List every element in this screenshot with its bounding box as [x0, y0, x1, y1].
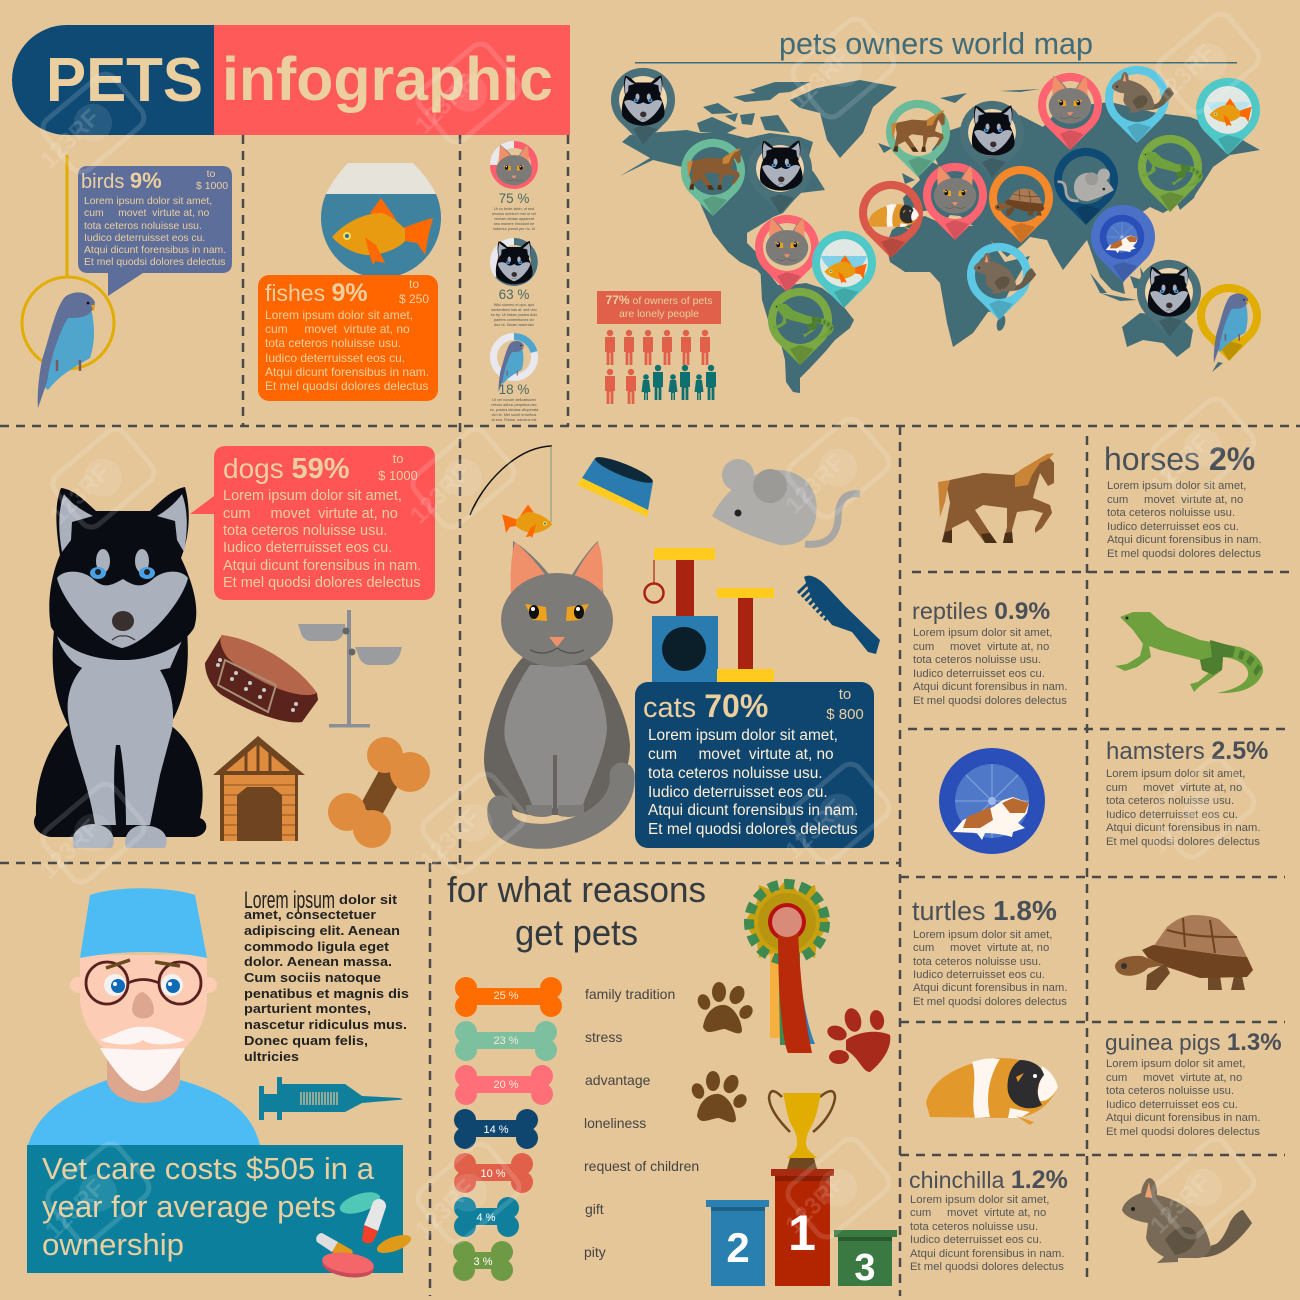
- panel: reptiles: [912, 598, 1263, 707]
- banner: vet care costs: year for average pets: [42, 1189, 336, 1224]
- callout: cats: cum movet virtute at, no: [648, 746, 834, 763]
- pin: cat: [755, 215, 819, 292]
- heading: pets owners world map: pets owners world map: [779, 26, 1093, 61]
- bone: 23%: [455, 1021, 557, 1061]
- text: turtles: turtles: [912, 896, 993, 926]
- title banner: [12, 25, 570, 135]
- donut: birds 18%: 18 %: [499, 382, 529, 397]
- text: chinchilla: 1.2%: [1011, 1166, 1068, 1194]
- icon: bone: [328, 737, 430, 848]
- callout: cats: cats 70%: [643, 688, 768, 724]
- callout: fishes: tota ceteros noluisse usu.: [265, 336, 401, 350]
- donut: dogs 63%: 63 %: [499, 287, 529, 302]
- icon: paw red: [825, 1006, 890, 1072]
- callout: dogs: Iudico deterruisset eos cu.: [223, 540, 392, 556]
- body: guinea pigs: Lorem ipsum dolor sit amet,: [1106, 1058, 1245, 1070]
- callout: 77% lonely people: are lonely people: [619, 308, 699, 320]
- heading: for what reasons get pets: get pets: [515, 912, 638, 953]
- body: turtles: cum movet virtute at, no: [913, 942, 1049, 954]
- body: hamsters: tota ceteros noluisse usu.: [1106, 795, 1234, 807]
- icon: toy mouse: [712, 459, 860, 545]
- callout: 77% lonely people: [597, 291, 721, 324]
- body: hamsters: Iudico deterruisset eos cu.: [1106, 809, 1238, 821]
- icon: food bowl: [577, 453, 655, 517]
- watermark stamps: 123RF: [1145, 1169, 1215, 1239]
- donut: birds 18%: vim te. Mel sonet erroribus: [492, 413, 536, 417]
- watermark stamps: 123RF: [45, 459, 115, 529]
- callout: dogs: [190, 446, 435, 600]
- body: turtles: Lorem ipsum dolor sit amet,: [913, 929, 1052, 941]
- donut: cats 75%: [492, 144, 536, 231]
- heading: for what reasons get pets: for what reasons: [447, 869, 706, 910]
- body: reptiles: cum movet virtute at, no: [913, 641, 1049, 653]
- text: chinchilla: chinchilla: [909, 1167, 1011, 1193]
- icon: kennel: [213, 736, 305, 841]
- pin: hamster: [1091, 205, 1155, 282]
- pin: husky: [611, 68, 675, 145]
- callout: 77% lonely people: 77% of owners of pets: [606, 293, 712, 307]
- panel: dogs: [34, 446, 435, 848]
- pin: chinchilla: [1105, 66, 1174, 143]
- text: horses: horses: [1104, 441, 1209, 477]
- bone: 10%: [454, 1153, 533, 1193]
- illustration: guinea pig: [926, 1058, 1058, 1125]
- watermark stamps: 123RF: [780, 794, 850, 864]
- callout: dogs: dogs 59%: [223, 453, 350, 485]
- callout: fishes: Iudico deterruisset eos cu.: [265, 351, 405, 365]
- watermark stamps: 123RF: [35, 104, 105, 174]
- watermark stamps: 123RF: [785, 44, 855, 114]
- bone: 20%: [455, 1065, 553, 1105]
- callout: birds: tota ceteros noluisse usu.: [84, 221, 202, 232]
- bone: 14%: 14 %: [483, 1124, 509, 1136]
- pin: husky: [748, 137, 812, 214]
- pin: horse: [681, 139, 745, 216]
- callout: birds: Atqui dicunt forensibus in nam.: [84, 245, 226, 256]
- text: horses: 2%: [1209, 441, 1255, 477]
- donut: dogs 63%: duo ut. Dicam assentior: [494, 323, 535, 327]
- illustration: horse: [938, 453, 1054, 543]
- callout: birds: $ 1000: [196, 180, 228, 192]
- illustration: hamster wheel: [939, 748, 1045, 854]
- pin: horse: [886, 100, 950, 177]
- watermark stamps: 123RF: [1150, 39, 1220, 109]
- icon: paw brown lower: [690, 1071, 749, 1122]
- body: reptiles: Lorem ipsum dolor sit amet,: [913, 627, 1052, 639]
- text: vet lorem ipsum: penatibus et magnis dis: [244, 986, 409, 1001]
- icon: rosette: [744, 878, 830, 1053]
- body: reptiles: Et mel quodsi dolores delectus: [913, 695, 1067, 707]
- illustration: cat: [484, 541, 630, 836]
- donut: birds 18%: at sea. Fuisse, sanctus est: [492, 418, 537, 422]
- body: reptiles: Iudico deterruisset eos cu.: [913, 668, 1045, 680]
- text: vet lorem ipsum: Lorem ipsum: [244, 887, 335, 914]
- panel: fishes: [258, 163, 441, 401]
- icon: trophy: [769, 1091, 835, 1169]
- banner: vet care costs: [27, 1145, 403, 1273]
- text: vet lorem ipsum: ultricies: [244, 1049, 299, 1064]
- text: vet lorem ipsum: adipiscing elit. Aenean: [244, 923, 400, 938]
- panel: turtles: [912, 895, 1253, 1008]
- callout: cats: Iudico deterruisset eos cu.: [648, 784, 828, 801]
- text: vet lorem ipsum: Donec quam felis,: [244, 1033, 368, 1048]
- donut: cats 75%: sea munere tincidunt ne: [494, 222, 534, 226]
- watermark stamps: 123RF: [1145, 789, 1215, 859]
- callout: cats: to: [839, 686, 851, 703]
- callout: cats: tota ceteros noluisse usu.: [648, 765, 823, 782]
- watermark stamps: 123RF: [410, 69, 480, 139]
- text: vet lorem ipsum: dolor sit: [339, 892, 398, 907]
- watermark stamps: 123RF: [410, 1174, 480, 1244]
- podium: 1: [771, 1169, 834, 1286]
- body: horses: tota ceteros noluisse usu.: [1107, 507, 1235, 519]
- callout: dogs: to: [393, 451, 403, 466]
- watermark stamps: 123RF: [780, 1169, 850, 1239]
- watermark stamps: 123RF: [1145, 429, 1215, 499]
- callout: cats: Lorem ipsum dolor sit amet,: [648, 727, 838, 744]
- donut: dogs 63%: Wisi summo ei quo, quo: [494, 303, 534, 307]
- icon: collar: [205, 635, 318, 722]
- panel: cats: [470, 446, 880, 848]
- icon: cat tree: [644, 548, 774, 683]
- pin: guinea pig: [859, 181, 923, 258]
- bone: 3%: 3 %: [474, 1256, 493, 1268]
- pin: lizard: [1138, 135, 1203, 212]
- bone: 23%: 23 %: [493, 1035, 519, 1047]
- bone chart labels: family tradition: [585, 986, 675, 1002]
- callout: fishes: cum movet virtute at, no: [265, 322, 410, 336]
- map pins: [611, 66, 1261, 365]
- illustration: husky: [34, 487, 206, 848]
- donut: birds 18%: ex, postea fabulas vituperata: [490, 408, 539, 412]
- callout: dogs: Atqui dicunt forensibus in nam.: [223, 558, 421, 574]
- body: guinea pigs: Iudico deterruisset eos cu.: [1106, 1099, 1238, 1111]
- pin: bird: [1197, 284, 1261, 363]
- illustration: iguana: [1115, 612, 1263, 693]
- text: vet lorem ipsum: commodo ligula eget: [244, 939, 390, 954]
- donut: dogs 63%: sententiam has at, sed duo: [491, 308, 537, 312]
- podium: 1: 1: [788, 1205, 816, 1261]
- callout: fishes: Et mel quodsi dolores delectus: [265, 379, 428, 393]
- bone: 3%: [453, 1241, 513, 1281]
- body: chinchilla: Iudico deterruisset eos cu.: [910, 1234, 1042, 1246]
- pin: fish: [812, 231, 876, 308]
- donut: dogs 63%: [491, 241, 537, 327]
- callout: dogs: Et mel quodsi dolores delectus: [223, 575, 420, 591]
- banner: vet care costs: Vet care costs $505 in a: [42, 1151, 375, 1186]
- donut: cats 75%: mucius omnium mei ut vel: [492, 212, 536, 216]
- icon: paw brown: [696, 982, 755, 1033]
- bone: 4%: 4 %: [477, 1212, 496, 1224]
- callout: dogs: Lorem ipsum dolor sit amet,: [223, 488, 402, 504]
- pin: mouse: [1054, 148, 1118, 225]
- icon: pills: [316, 1188, 413, 1281]
- podium: 3: 3: [854, 1247, 876, 1289]
- donut: birds 18%: [490, 336, 539, 422]
- bone: 20%: 20 %: [493, 1079, 519, 1091]
- bone: 10%: 10 %: [480, 1168, 506, 1180]
- body: turtles: Iudico deterruisset eos cu.: [913, 969, 1045, 981]
- panel: vet: [27, 887, 413, 1281]
- callout: fishes: Lorem ipsum dolor sit amet,: [265, 308, 413, 322]
- bone chart labels: request of children: [584, 1158, 699, 1174]
- icon: parrot: [38, 292, 95, 408]
- podium: [706, 1169, 897, 1289]
- world map: [620, 80, 1260, 393]
- watermark stamps: 123RF: [415, 804, 485, 874]
- body: horses: Et mel quodsi dolores delectus: [1107, 548, 1261, 560]
- text: hamsters: hamsters: [1106, 738, 1211, 765]
- body: chinchilla: cum movet virtute at, no: [910, 1207, 1046, 1219]
- callout: cats: Atqui dicunt forensibus in nam.: [648, 802, 858, 819]
- panel: reasons: [447, 869, 897, 1289]
- panel: percent column: [490, 144, 539, 422]
- bone chart labels: advantage: [585, 1072, 651, 1088]
- pin: cat: [923, 163, 987, 240]
- bone: 25%: 25 %: [493, 990, 519, 1002]
- body: reptiles: tota ceteros noluisse usu.: [913, 654, 1041, 666]
- callout: birds: to: [207, 168, 216, 180]
- body: guinea pigs: Et mel quodsi dolores delectus: [1106, 1126, 1260, 1138]
- title: infographic: infographic: [222, 45, 553, 113]
- body: turtles: tota ceteros noluisse usu.: [913, 956, 1041, 968]
- icon: fishing rod toy: [470, 446, 552, 538]
- bone chart labels: pity: [584, 1244, 606, 1260]
- pin: husky: [960, 101, 1024, 178]
- text: vet lorem ipsum: parturient montes,: [244, 1001, 371, 1016]
- text: guinea pigs: 1.3%: [1227, 1029, 1282, 1056]
- bone chart labels: loneliness: [584, 1115, 646, 1131]
- illustration: turtle: [1115, 915, 1253, 990]
- callout: dogs: cum movet virtute at, no: [223, 506, 398, 522]
- text: reptiles: reptiles: [912, 598, 994, 624]
- banner: vet care costs: ownership: [42, 1227, 184, 1262]
- callout: birds: Lorem ipsum dolor sit amet,: [84, 196, 212, 207]
- donut: birds 18%: Ut vel novum delicatissimi: [492, 398, 536, 402]
- body: horses: Atqui dicunt forensibus in nam.: [1107, 534, 1261, 546]
- bone: 14%: [454, 1109, 538, 1149]
- panel: guinea pigs: [926, 1029, 1282, 1138]
- icon: bowl stand: [298, 610, 402, 728]
- bone: 4%: [454, 1197, 519, 1237]
- donut: birds 18%: rebum adhuc perpetua nec: [491, 403, 537, 407]
- callout: fishes: [258, 275, 438, 401]
- illustration: chinchilla: [1122, 1178, 1252, 1263]
- pin: cat: [1038, 73, 1102, 150]
- illustration: vet: [28, 888, 260, 1145]
- body: hamsters: Lorem ipsum dolor sit amet,: [1106, 768, 1245, 780]
- podium: 3: [834, 1230, 897, 1289]
- body: turtles: Et mel quodsi dolores delectus: [913, 996, 1067, 1008]
- text: reptiles: 0.9%: [994, 598, 1050, 625]
- callout: cats: Et mel quodsi dolores delectus: [648, 821, 858, 838]
- callout: cats: $ 800: [826, 706, 864, 723]
- podium: 2: 2: [726, 1224, 750, 1271]
- podium: 2: [706, 1200, 769, 1286]
- body: chinchilla: Lorem ipsum dolor sit amet,: [910, 1194, 1049, 1206]
- body: chinchilla: Atqui dicunt forensibus in nam.: [910, 1248, 1064, 1260]
- text: vet lorem ipsum: Cum sociis natoque: [244, 970, 381, 985]
- donut: dogs 63%: ex try. Ut fuisse postea dolo: [491, 313, 537, 317]
- body: hamsters: Atqui dicunt forensibus in nam.: [1106, 822, 1260, 834]
- callout: birds: [78, 166, 232, 296]
- panel: world map: [611, 26, 1261, 393]
- panel: birds: [22, 155, 232, 408]
- text: vet lorem ipsum: nascetur ridiculus mus.: [244, 1017, 407, 1032]
- bone chart: [453, 977, 562, 1281]
- callout: birds: cum movet virtute at, no: [84, 208, 210, 219]
- text: vet lorem ipsum: [244, 887, 409, 1064]
- hanging perch ring: [22, 155, 114, 369]
- callout: dogs: tota ceteros noluisse usu.: [223, 523, 387, 539]
- donut: dogs 63%: partem contentiones vix: [494, 318, 534, 322]
- body: horses: Iudico deterruisset eos cu.: [1107, 521, 1239, 533]
- title: infographic: [214, 25, 570, 135]
- callout: fishes: $ 250: [399, 292, 429, 306]
- pin: fish: [1196, 78, 1260, 155]
- icon: syringe: [259, 1077, 403, 1120]
- callout: birds: birds 9%: [81, 168, 162, 193]
- text: hamsters: 2.5%: [1211, 737, 1268, 765]
- donut: cats 75%: ludemur possit per no, id: [493, 227, 535, 231]
- body: horses: Lorem ipsum dolor sit amet,: [1107, 480, 1246, 492]
- body: reptiles: Atqui dicunt forensibus in nam.: [913, 681, 1067, 693]
- bone chart labels: stress: [585, 1029, 622, 1045]
- body: horses: cum movet virtute at, no: [1107, 494, 1243, 506]
- pictogram: people: [605, 330, 716, 404]
- callout: fishes: Atqui dicunt forensibus in nam.: [265, 365, 429, 379]
- callout: fishes: to: [409, 277, 419, 291]
- donut: cats 75%: 75 %: [499, 191, 529, 206]
- body: guinea pigs: Atqui dicunt forensibus in nam.: [1106, 1112, 1260, 1124]
- body: chinchilla: Et mel quodsi dolores delectus: [910, 1261, 1064, 1273]
- text: turtles: 1.8%: [993, 895, 1057, 926]
- icon: fish bowl: [321, 163, 441, 278]
- text: vet lorem ipsum: dolor. Aenean massa.: [244, 954, 392, 969]
- callout: birds: Iudico deterruisset eos cu.: [84, 233, 205, 244]
- callout: cats: [635, 682, 874, 848]
- pin: lizard: [768, 288, 834, 365]
- watermark stamps: 123RF: [780, 449, 850, 519]
- panel: horses: [938, 441, 1261, 560]
- bone: 25%: [455, 977, 562, 1017]
- title: PETS: [12, 25, 214, 135]
- callout: dogs: $ 1000: [378, 468, 418, 483]
- body: guinea pigs: cum movet virtute at, no: [1106, 1072, 1242, 1084]
- title: PETS: PETS: [46, 46, 203, 115]
- pin: husky: [1137, 260, 1201, 337]
- text: guinea pigs: guinea pigs: [1105, 1030, 1227, 1055]
- watermark stamps: 123RF: [35, 814, 105, 884]
- body: hamsters: Et mel quodsi dolores delectus: [1106, 836, 1260, 848]
- panel: chinchilla: [909, 1166, 1252, 1273]
- donut: cats 75%: veniam tantas appareat: [494, 217, 535, 221]
- pin: chinchilla: [967, 243, 1036, 320]
- callout: fishes: fishes 9%: [265, 279, 368, 307]
- watermark stamps: 123RF: [405, 459, 475, 529]
- body: chinchilla: tota ceteros noluisse usu.: [910, 1221, 1038, 1233]
- callout: birds: Et mel quodsi dolores delectus: [84, 257, 226, 268]
- bone chart labels: gift: [585, 1201, 604, 1217]
- panel: hamsters: [939, 737, 1268, 854]
- body: turtles: Atqui dicunt forensibus in nam.: [913, 982, 1067, 994]
- body: guinea pigs: tota ceteros noluisse usu.: [1106, 1085, 1234, 1097]
- body: hamsters: cum movet virtute at, no: [1106, 782, 1242, 794]
- watermark stamps: 123RF: [40, 1174, 110, 1244]
- icon: comb: [803, 576, 880, 654]
- text: vet lorem ipsum: amet, consectetuer: [244, 907, 376, 922]
- pin: turtle: [989, 166, 1053, 243]
- donut: cats 75%: Ut cu brute labin, ut sed: [494, 207, 534, 211]
